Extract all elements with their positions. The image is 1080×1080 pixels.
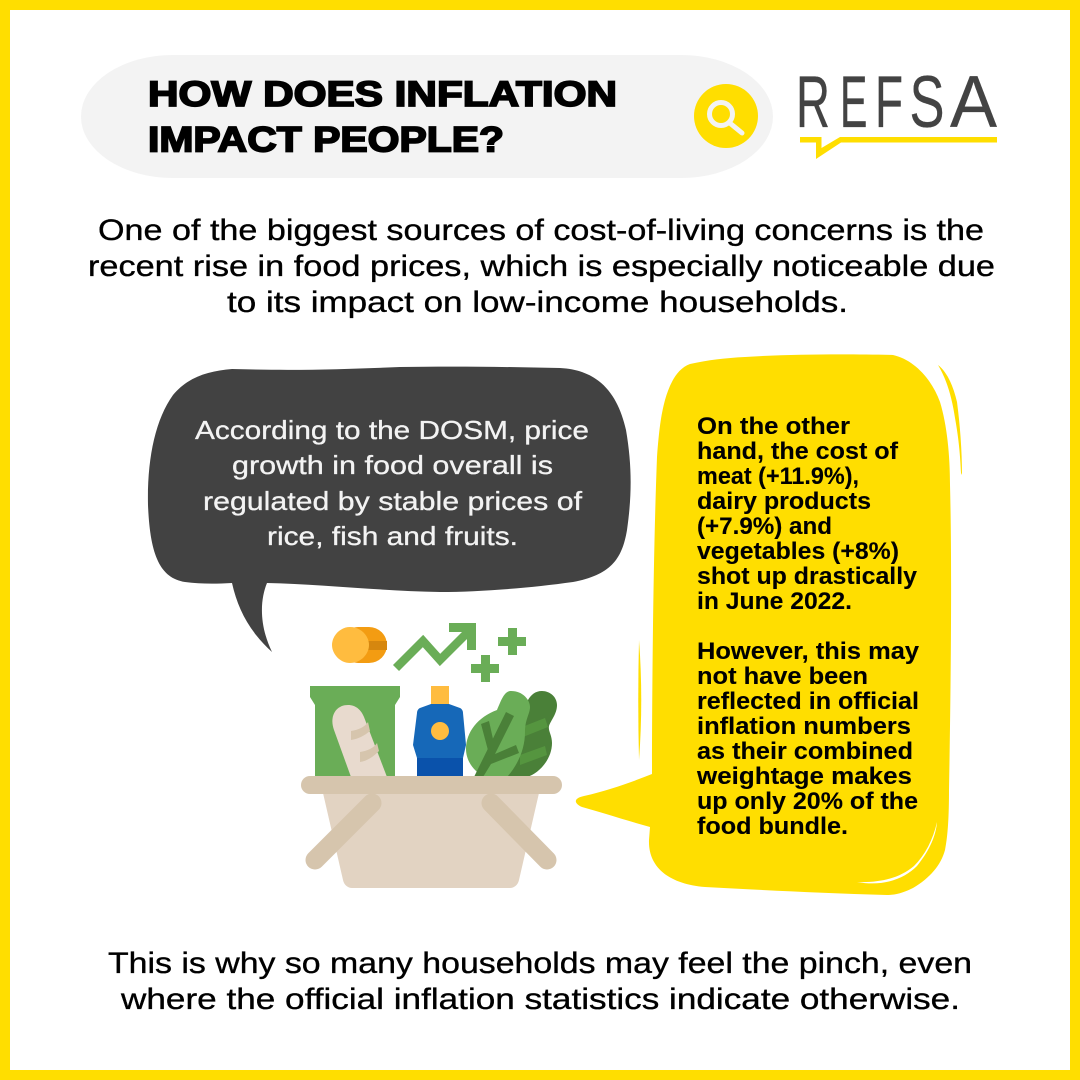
icon: grocery basket illustration <box>301 623 562 888</box>
closing statement: This is why so many households may feel the pinch, even <box>108 947 972 980</box>
yellow speech bubble <box>576 354 962 895</box>
decorative slivers <box>938 365 962 475</box>
icon: blue bottle <box>413 686 466 777</box>
bubble text: dairy products <box>697 488 871 515</box>
intro paragraph: One of the biggest sources of cost-of-living concerns is the <box>98 214 984 247</box>
header pill <box>81 55 773 178</box>
closing statement: where the official inflation statistics indicate otherwise. <box>120 983 960 1016</box>
icon: green grocery bag <box>310 686 400 777</box>
bubble text: According to the DOSM, price <box>195 415 589 445</box>
icon: coin <box>332 627 387 663</box>
bubble text <box>195 415 589 551</box>
intro paragraph <box>88 214 995 319</box>
icon: leafy greens <box>466 691 557 777</box>
bubble text: reflected in official <box>697 688 919 715</box>
bubble text: shot up drastically <box>697 563 918 590</box>
logo: REFSA <box>796 62 997 159</box>
icon: basket handles <box>315 803 547 860</box>
bubble text: However, this may <box>697 638 920 665</box>
bubble text: growth in food overall is <box>232 450 553 480</box>
logo: REFSA: F <box>875 62 903 143</box>
logo: REFSA: E <box>840 62 867 143</box>
bubble text: (+7.9%) and <box>697 513 832 540</box>
icon: rising price arrow <box>396 623 476 668</box>
bubble text: On the other <box>697 413 850 440</box>
icon: bread loaf <box>332 705 387 777</box>
icon: magnifying glass <box>694 84 758 148</box>
intro paragraph: to its impact on low-income households. <box>227 286 848 319</box>
icon: plus signs <box>471 628 526 682</box>
bubble text: weightage makes <box>696 763 912 790</box>
bubble text <box>696 413 920 840</box>
bubble text: regulated by stable prices of <box>203 486 583 516</box>
bubble text: hand, the cost of <box>697 438 899 465</box>
bubble text: food bundle. <box>697 813 848 840</box>
icon: basket body <box>323 793 539 888</box>
title: IMPACT PEOPLE? <box>148 120 504 160</box>
logo: REFSA: S <box>910 62 944 143</box>
title <box>148 75 617 160</box>
bubble text: meat (+11.9%), <box>697 463 859 490</box>
icon: basket rim <box>301 776 562 794</box>
intro paragraph: recent rise in food prices, which is especially noticeable due <box>88 250 995 283</box>
bubble text: inflation numbers <box>697 713 911 740</box>
dark speech bubble <box>148 367 631 652</box>
closing statement <box>108 947 972 1016</box>
bubble text: as their combined <box>697 738 913 765</box>
logo: REFSA: R <box>796 62 830 143</box>
bubble text: vegetables (+8%) <box>697 538 899 565</box>
logo: REFSA: A <box>950 62 997 143</box>
bubble text: rice, fish and fruits. <box>267 521 518 551</box>
bubble text: not have been <box>697 663 868 690</box>
title: HOW DOES INFLATION <box>148 75 617 114</box>
bubble text: up only 20% of the <box>697 788 918 815</box>
bubble text: in June 2022. <box>697 588 852 615</box>
